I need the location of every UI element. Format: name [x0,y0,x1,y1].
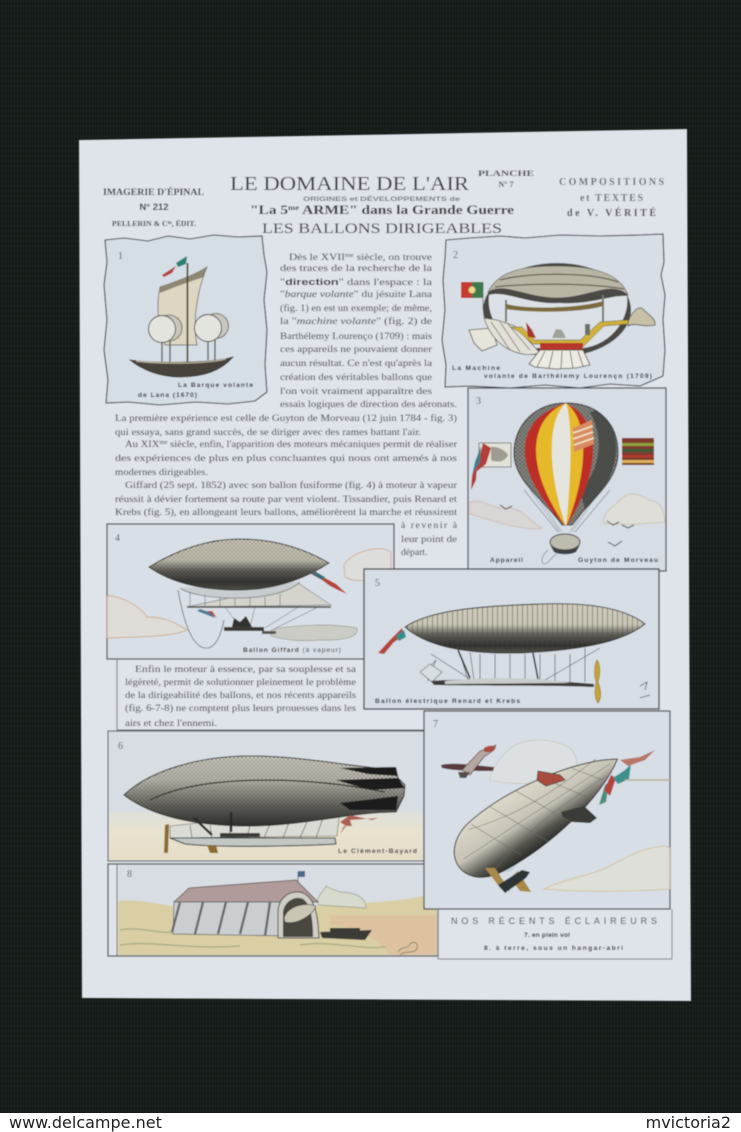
panel 1: barque volante: 1 [118,251,123,262]
illustration: hangar [172,871,372,940]
illustration: Giffard airship [149,539,347,648]
pennant [378,628,404,654]
text block: intro column: essais logiques de direction des aéronats. [280,399,457,410]
panel 8: hangar [108,864,438,956]
clouds: left pink [470,501,542,529]
text block: full-width history [115,413,458,558]
text block: full-width history: qui essaya, sans grand succès, de se diriger avec des rames battant l'air. [115,427,421,438]
caption 3: Guyton de Morveau [578,557,658,564]
header left: Imagerie d'Epinal [103,186,204,228]
section heading: LES BALLONS DIRIGEABLES [262,221,502,237]
panel 3: Guyton de Morveau [468,388,666,571]
panel 7: recent airship in flight: 7 [433,719,438,730]
clouds left [107,596,187,638]
illustration: Clement-Bayard airship [124,756,405,853]
text block: intro column: "barque volante " du jésuite Lana [280,289,433,300]
caption 3: Appareil [490,557,523,564]
text block: petrol engine: légèreté, permit de solutionner pleinement le problème [125,677,356,688]
text block: intro column: aucun résultat. Ce n'est qu'après la [280,358,433,369]
clouds right [344,549,391,581]
caption 3 [490,557,658,564]
subtitle la 5me arme: ARME" dans la Grande Guerre [299,203,515,217]
text block: intro column: "direction " dans l'espace : la [280,277,433,288]
cloud upper [489,740,577,784]
panel 4: Giffard balloon [107,524,394,659]
birds [640,682,650,698]
cloud right [544,846,670,891]
illustration: basket [542,534,580,564]
illustration: signature [398,942,417,955]
panel 2: machine volante [442,234,665,388]
text block: intro column: (fig. 1) en est un exemple; de même, [280,303,432,314]
text block: intro column: siècle, on trouve [354,252,432,263]
publisher: PELLERIN & C [112,219,166,228]
panel 5: Renard and Krebs balloon [364,569,659,709]
text block: petrol engine: de la dirigeabilité des ballons, et nos récents appareils [125,690,356,701]
illustration: flying ship [130,256,233,377]
text block: petrol engine: airs et chez l'ennemi. [125,718,217,729]
text block: petrol engine: (fig. 6-7-8) ne comptent plus leurs prouesses dans les [125,703,356,714]
header left: Imagerie d'Epinal: IMAGERIE D'ÉPINAL [103,186,204,198]
header right: compositions: et TEXTES [580,193,643,204]
header right: compositions: COMPOSITIONS [559,177,664,188]
watermark: seller: mvictoria2 [646,1113,731,1132]
illustration: oval machine [483,263,631,357]
header right: compositions [559,177,664,219]
text block: full-width history: des expériences de plus en plus concluantes qui nous ont amenés à nos [115,453,457,464]
flag right [622,438,654,465]
beige ground haze [109,812,423,860]
illustration: la France airship [378,604,645,703]
text block: full-width history: réussit à dévier fortement sa route par vent violent. Tissandier, puis Renard et [115,494,457,505]
text block: intro column: des traces de la recherche de la [280,263,433,274]
text block: intro column: création des véritables ballons que [280,372,432,383]
panel 6: Clement-Bayard [108,731,424,861]
smoke [271,625,357,641]
panel 5: Renard and Krebs balloon: 5 [375,578,380,589]
illustration: flag [461,282,483,310]
panel 1: barque volante [104,235,267,405]
publisher: ie [168,220,172,226]
illustration: tilted airship [440,734,670,893]
ground: grass strokes [120,929,385,948]
postcard [79,129,691,1001]
text block: petrol engine: Enfin le moteur à essence, par sa souplesse et sa [135,664,357,675]
caption 1 [138,382,253,399]
text block: full-width history: modernes dirigeables. [115,467,208,478]
text block: intro column [280,252,457,410]
subtitle la 5me arme: me [288,204,299,212]
text block: full-width history: départ. [401,547,427,558]
plate number [478,169,534,189]
publisher: , ÉDIT. [172,218,196,228]
text block: full-width history: Au XIX [125,439,156,450]
text block: full-width history: à revenir à [401,520,458,531]
text block: petrol engine [117,660,424,730]
text block: intro column: l'on voit vraiment apparaître des [280,386,432,397]
ground: pink strip [330,915,437,955]
illustration: biplane [441,745,496,778]
plate number: PLANCHE [478,169,534,178]
caption 6: Le Clément-Bayard [338,848,417,855]
panel 2: machine volante: 2 [453,250,458,261]
panel 6: Clement-Bayard: 6 [118,741,123,752]
text block: intro column: ces appareils ne pouvaient donner [280,344,433,355]
birds [500,505,634,546]
caption 1: La Barque volante [178,382,253,389]
caption 5: Ballon électrique Renard et Krebs [375,698,520,705]
text block: full-width history: La première expérience est celle de Guyton de Morveau (12 juin 1784 - fig. 3) [115,413,457,424]
caption 1: de Lana (1670) [138,392,197,399]
trees [318,886,366,908]
illustration: tail [469,328,497,351]
caption box: nos recents eclaireurs [438,909,672,959]
clouds [603,494,665,524]
white watermark strip [0,1113,741,1132]
text block: intro column: Dès le XVII [289,252,336,263]
illustration: skirt [529,350,590,369]
caption 2 [452,365,652,380]
caption line 7: 7. en plein vol [524,932,570,939]
panel 7: recent airship in flight [424,711,670,909]
propeller [595,660,601,703]
panel 3: Guyton de Morveau: 3 [476,396,481,407]
main title block: LE DOMAINE DE L'AIR [230,174,469,195]
text block: full-width history: Giffard (25 sept. 1852) avec son ballon fusiforme (fig. 4) à moteur à vapeur [125,480,458,491]
header right: compositions: de V. VÉRITÉ [567,207,656,219]
watermark: site: www.delcampe.net [9,1113,162,1132]
pennants [599,782,609,805]
sky [118,865,437,905]
caption line 8: 8. à terre, sous un hangar-abri [484,945,623,952]
inner frame line [116,864,118,956]
panel 8: hangar: 8 [127,869,132,880]
text block: full-width history: me [159,440,168,446]
text block: intro column: Barthélemy Lourenço (1709) : mais [280,331,432,342]
text block: full-width history: siècle, enfin, l'apparition des moteurs mécaniques permit de réaliser [167,439,458,450]
illustration: head [628,308,655,326]
caption 2: volante de Barthélemy Lourenço (1709) [484,373,652,380]
subtitle la 5me arme: "La 5 [250,203,281,217]
text block: intro column: me [345,253,354,259]
main title block [230,169,534,237]
caption 4: Ballon Giffard (à vapeur) [243,647,341,654]
illustration: striped balloon [514,403,619,532]
flag left [471,443,511,490]
panel 4: Giffard balloon: 4 [115,533,120,544]
ground [118,896,437,955]
text block: full-width history: Krebs (fig. 5), en allongeant leurs ballons, améliorèrent la marche et réussirent [115,507,457,518]
caption heading: NOS RÉCENTS ÉCLAIREURS [451,916,657,926]
text block: full-width history: leur point de [401,534,457,545]
subtitle origins: ORIGINES et DÉVELOPPEMENTS de [303,195,461,203]
text block: intro column: la " machine volante " (fig. 2) de [280,316,432,327]
caption 2: La Machine [452,365,500,372]
plate number: N° 7 [499,180,513,189]
issue number: N° 212 [139,202,169,213]
